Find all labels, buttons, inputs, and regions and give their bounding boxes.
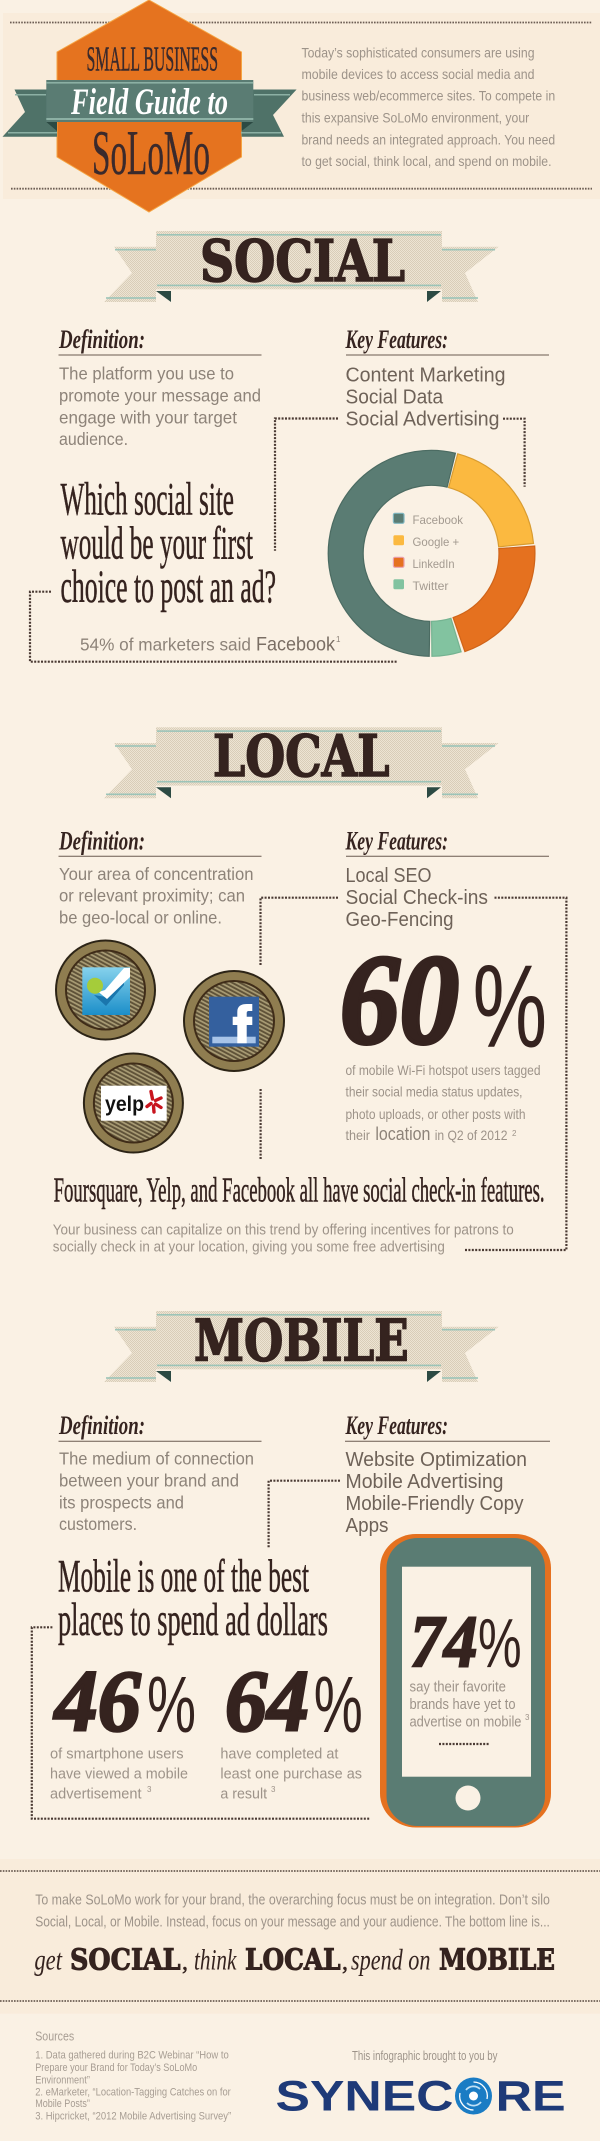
social stat: Facebook xyxy=(256,634,335,656)
definition heading: Definition: xyxy=(58,826,145,855)
local closing text: socially check in at your location, giving you some free advertising xyxy=(53,1239,445,1256)
mobile headline: places to spend ad dollars xyxy=(58,1594,328,1646)
stat text: brands have yet to xyxy=(410,1696,516,1713)
sources xyxy=(35,2029,231,2122)
donut chart xyxy=(328,450,535,656)
local definition xyxy=(58,826,262,927)
stat text: 3 xyxy=(525,1713,530,1722)
definition text: customers. xyxy=(59,1514,137,1534)
stat text: have completed at xyxy=(220,1745,339,1762)
title badge xyxy=(2,0,297,212)
key features list: Social Advertising xyxy=(346,408,500,430)
intro paragraph: brand needs an integrated approach. You need xyxy=(302,131,555,147)
definition heading: Definition: xyxy=(58,1411,145,1440)
stat text: location tagging: of mobile Wi-Fi hotspot users tagged xyxy=(346,1062,540,1078)
bottom line slogan xyxy=(34,1942,555,1976)
definition text: be geo-local or online. xyxy=(59,907,222,927)
stat text: location tagging: their social media status updates, xyxy=(346,1084,522,1100)
sources list xyxy=(35,2050,231,2122)
phone button xyxy=(456,1786,480,1810)
stat text: location tagging: photo uploads, or other posts with xyxy=(346,1106,526,1122)
definition text: audience. xyxy=(59,429,128,449)
stat text: location tagging: in Q2 of 2012 xyxy=(435,1127,508,1143)
stat: 64 percent: 64 xyxy=(225,1654,309,1751)
header band xyxy=(3,13,600,199)
stat: 46 percent: 46 xyxy=(53,1654,141,1751)
key features heading: Key Features: xyxy=(345,325,448,354)
stat text: location tagging xyxy=(346,1062,540,1144)
stat text xyxy=(220,1745,362,1802)
slice: facebook xyxy=(328,450,455,656)
phone body xyxy=(386,1538,545,1826)
stat: 60 percent xyxy=(340,929,547,1073)
banner: local xyxy=(104,723,499,798)
mobile definition xyxy=(58,1411,262,1534)
intro paragraph: mobile devices to access social media and xyxy=(302,66,534,82)
stat: 74 percent: % xyxy=(478,1604,522,1682)
phone casing xyxy=(380,1534,551,1828)
stat: 60 percent: 60 xyxy=(340,929,459,1071)
intro paragraph: Today’s sophisticated consumers are using xyxy=(302,44,534,60)
sources heading: Sources xyxy=(35,2029,75,2044)
stat: 74 percent: 74 xyxy=(410,1602,478,1684)
local closing text: Your business can capitalize on this trend by offering incentives for patrons to xyxy=(53,1221,514,1238)
banner: social xyxy=(104,228,499,302)
heading: social: SOCIAL xyxy=(200,228,405,295)
stat text: have viewed a mobile xyxy=(50,1765,188,1782)
mobile headline: Mobile is one of the best xyxy=(58,1551,309,1603)
intro paragraph: to get social, think local, and spend on mobile. xyxy=(302,153,552,169)
sources list: Environment” xyxy=(35,2074,90,2086)
social stat: 1 xyxy=(336,635,341,644)
key features list: Content Marketing xyxy=(346,364,506,386)
stat text: location tagging: 2 xyxy=(512,1129,517,1138)
stat: 60 percent: % xyxy=(473,941,547,1073)
stat text: 3 xyxy=(271,1785,276,1794)
social question: choice to post an ad? xyxy=(60,561,276,613)
key features list: Website Optimization xyxy=(346,1449,527,1471)
logo: synecore xyxy=(276,2073,566,2121)
stat: 74 percent xyxy=(410,1602,522,1684)
title line: SoLoMo: SoLoMo xyxy=(92,117,210,188)
definition text: The platform you use to xyxy=(59,363,234,383)
logo: synecore: RE xyxy=(496,2073,566,2121)
sources list: 2. eMarketer, “Location-Tagging Catches on for xyxy=(35,2086,231,2098)
logo: synecore: SYNEC xyxy=(276,2073,454,2121)
legend: Facebook xyxy=(412,513,464,527)
sponsor credit: This infographic brought to you by xyxy=(352,2048,498,2063)
definition text: between your brand and xyxy=(59,1471,239,1491)
key features list: Local SEO xyxy=(346,865,432,887)
sources list: 1. Data gathered during B2C Webinar “How to xyxy=(35,2050,229,2062)
icon: yelp badge: yelp xyxy=(105,1093,144,1116)
legend: LinkedIn xyxy=(412,557,454,571)
social key features xyxy=(345,325,549,430)
bottom line slogan: , xyxy=(342,1949,348,1975)
key features list: Mobile Advertising xyxy=(346,1471,504,1493)
stat text: say their favorite xyxy=(410,1679,506,1696)
slice: twitter xyxy=(432,618,461,656)
icon: swirl xyxy=(455,2078,492,2114)
stat text: advertisement xyxy=(50,1785,142,1802)
ribbon xyxy=(2,80,297,137)
key features heading: Key Features: xyxy=(345,1411,448,1440)
title line: field guide to: Field Guide to xyxy=(70,82,228,123)
stat text: least one purchase as xyxy=(220,1765,362,1782)
mobile key features xyxy=(345,1411,550,1537)
definition heading: Definition: xyxy=(58,325,145,354)
definition text: The medium of connection xyxy=(59,1449,254,1469)
dotted connectors: social xyxy=(30,418,525,662)
intro paragraph: business web/ecommerce sites. To compete in xyxy=(302,88,555,104)
definition text: engage with your target xyxy=(59,407,237,427)
stat text xyxy=(410,1679,530,1731)
definition text: Your area of concentration xyxy=(59,864,254,884)
social definition xyxy=(58,325,262,449)
sources list: Mobile Posts” xyxy=(35,2098,90,2110)
social question xyxy=(60,473,276,613)
key features list: Social Check-ins xyxy=(346,887,488,909)
bottom line slogan: , xyxy=(182,1949,188,1975)
stat: 64 percent xyxy=(220,1654,363,1802)
stat text: a result xyxy=(220,1785,268,1802)
key features list xyxy=(346,865,488,931)
intro paragraph: this expansive SoLoMo environment, your xyxy=(302,110,529,126)
definition text: or relevant proximity; can xyxy=(59,886,245,906)
stat: 64 percent: % xyxy=(314,1660,363,1749)
stat text: of smartphone users xyxy=(50,1745,184,1762)
logo: synecore: O xyxy=(456,2073,492,2121)
sources list: 3. Hipcricket, “2012 Mobile Advertising Survey” xyxy=(35,2110,231,2122)
legend: Twitter xyxy=(412,579,448,593)
definition text xyxy=(59,1449,254,1534)
slice: google plus xyxy=(449,454,534,547)
phone screen xyxy=(402,1567,531,1777)
phone illustration xyxy=(380,1534,551,1828)
intro paragraph xyxy=(302,44,555,169)
key features list: Social Data xyxy=(346,386,444,408)
icon: facebook badge xyxy=(183,970,285,1072)
mobile headline xyxy=(58,1551,328,1646)
stat text: location tagging: location xyxy=(375,1124,430,1144)
dotted connectors: mobile xyxy=(32,1481,369,1819)
heading: mobile: MOBILE xyxy=(194,1308,409,1375)
bottom line slogan: SOCIAL xyxy=(70,1942,181,1976)
closing band xyxy=(0,1859,600,2014)
local key features xyxy=(345,826,549,931)
heading: local: LOCAL xyxy=(213,723,390,790)
definition text xyxy=(59,363,261,449)
social stat: 54% of marketers said xyxy=(80,635,251,655)
icon: foursquare badge xyxy=(55,940,156,1040)
stat text: 3 xyxy=(147,1785,152,1794)
bottom line slogan: LOCAL xyxy=(245,1942,341,1976)
dotted connectors: local xyxy=(260,898,566,1250)
bottom line slogan: get xyxy=(34,1943,62,1976)
stat text xyxy=(50,1745,188,1802)
key features heading: Key Features: xyxy=(345,826,448,855)
stat text: advertise on mobile xyxy=(410,1714,522,1731)
title badge: SMALL BUSINESS xyxy=(86,40,218,79)
banner: mobile xyxy=(104,1308,499,1382)
sources list: Prepare your Brand for Today’s SoLoMo xyxy=(35,2062,197,2074)
legend: Google + xyxy=(412,535,459,549)
orange hexagon xyxy=(57,0,242,212)
bottom line slogan: spend on xyxy=(351,1943,430,1976)
social question: Which social site xyxy=(60,473,234,525)
definition text xyxy=(59,864,254,927)
icon: yelp badge xyxy=(83,1052,184,1154)
local closing text xyxy=(53,1221,514,1256)
bottom line slogan: MOBILE xyxy=(439,1942,555,1976)
key features list xyxy=(346,364,506,430)
social question: would be your first xyxy=(60,517,253,569)
key features list xyxy=(346,1449,527,1537)
key features list: Apps xyxy=(346,1515,388,1537)
definition text: promote your message and xyxy=(59,385,261,405)
definition text: its prospects and xyxy=(59,1492,184,1512)
legend xyxy=(393,513,464,593)
slice: linkedin xyxy=(453,546,535,652)
closing paragraph xyxy=(35,1891,550,1930)
stat: 46 percent: % xyxy=(147,1660,196,1749)
stat text: location tagging: their xyxy=(346,1127,370,1143)
social stat xyxy=(80,634,341,656)
bottom line slogan: think xyxy=(194,1943,237,1976)
key features list: Geo-Fencing xyxy=(346,909,454,931)
key features list: Mobile-Friendly Copy xyxy=(346,1493,524,1515)
stat: 46 percent xyxy=(50,1654,196,1802)
